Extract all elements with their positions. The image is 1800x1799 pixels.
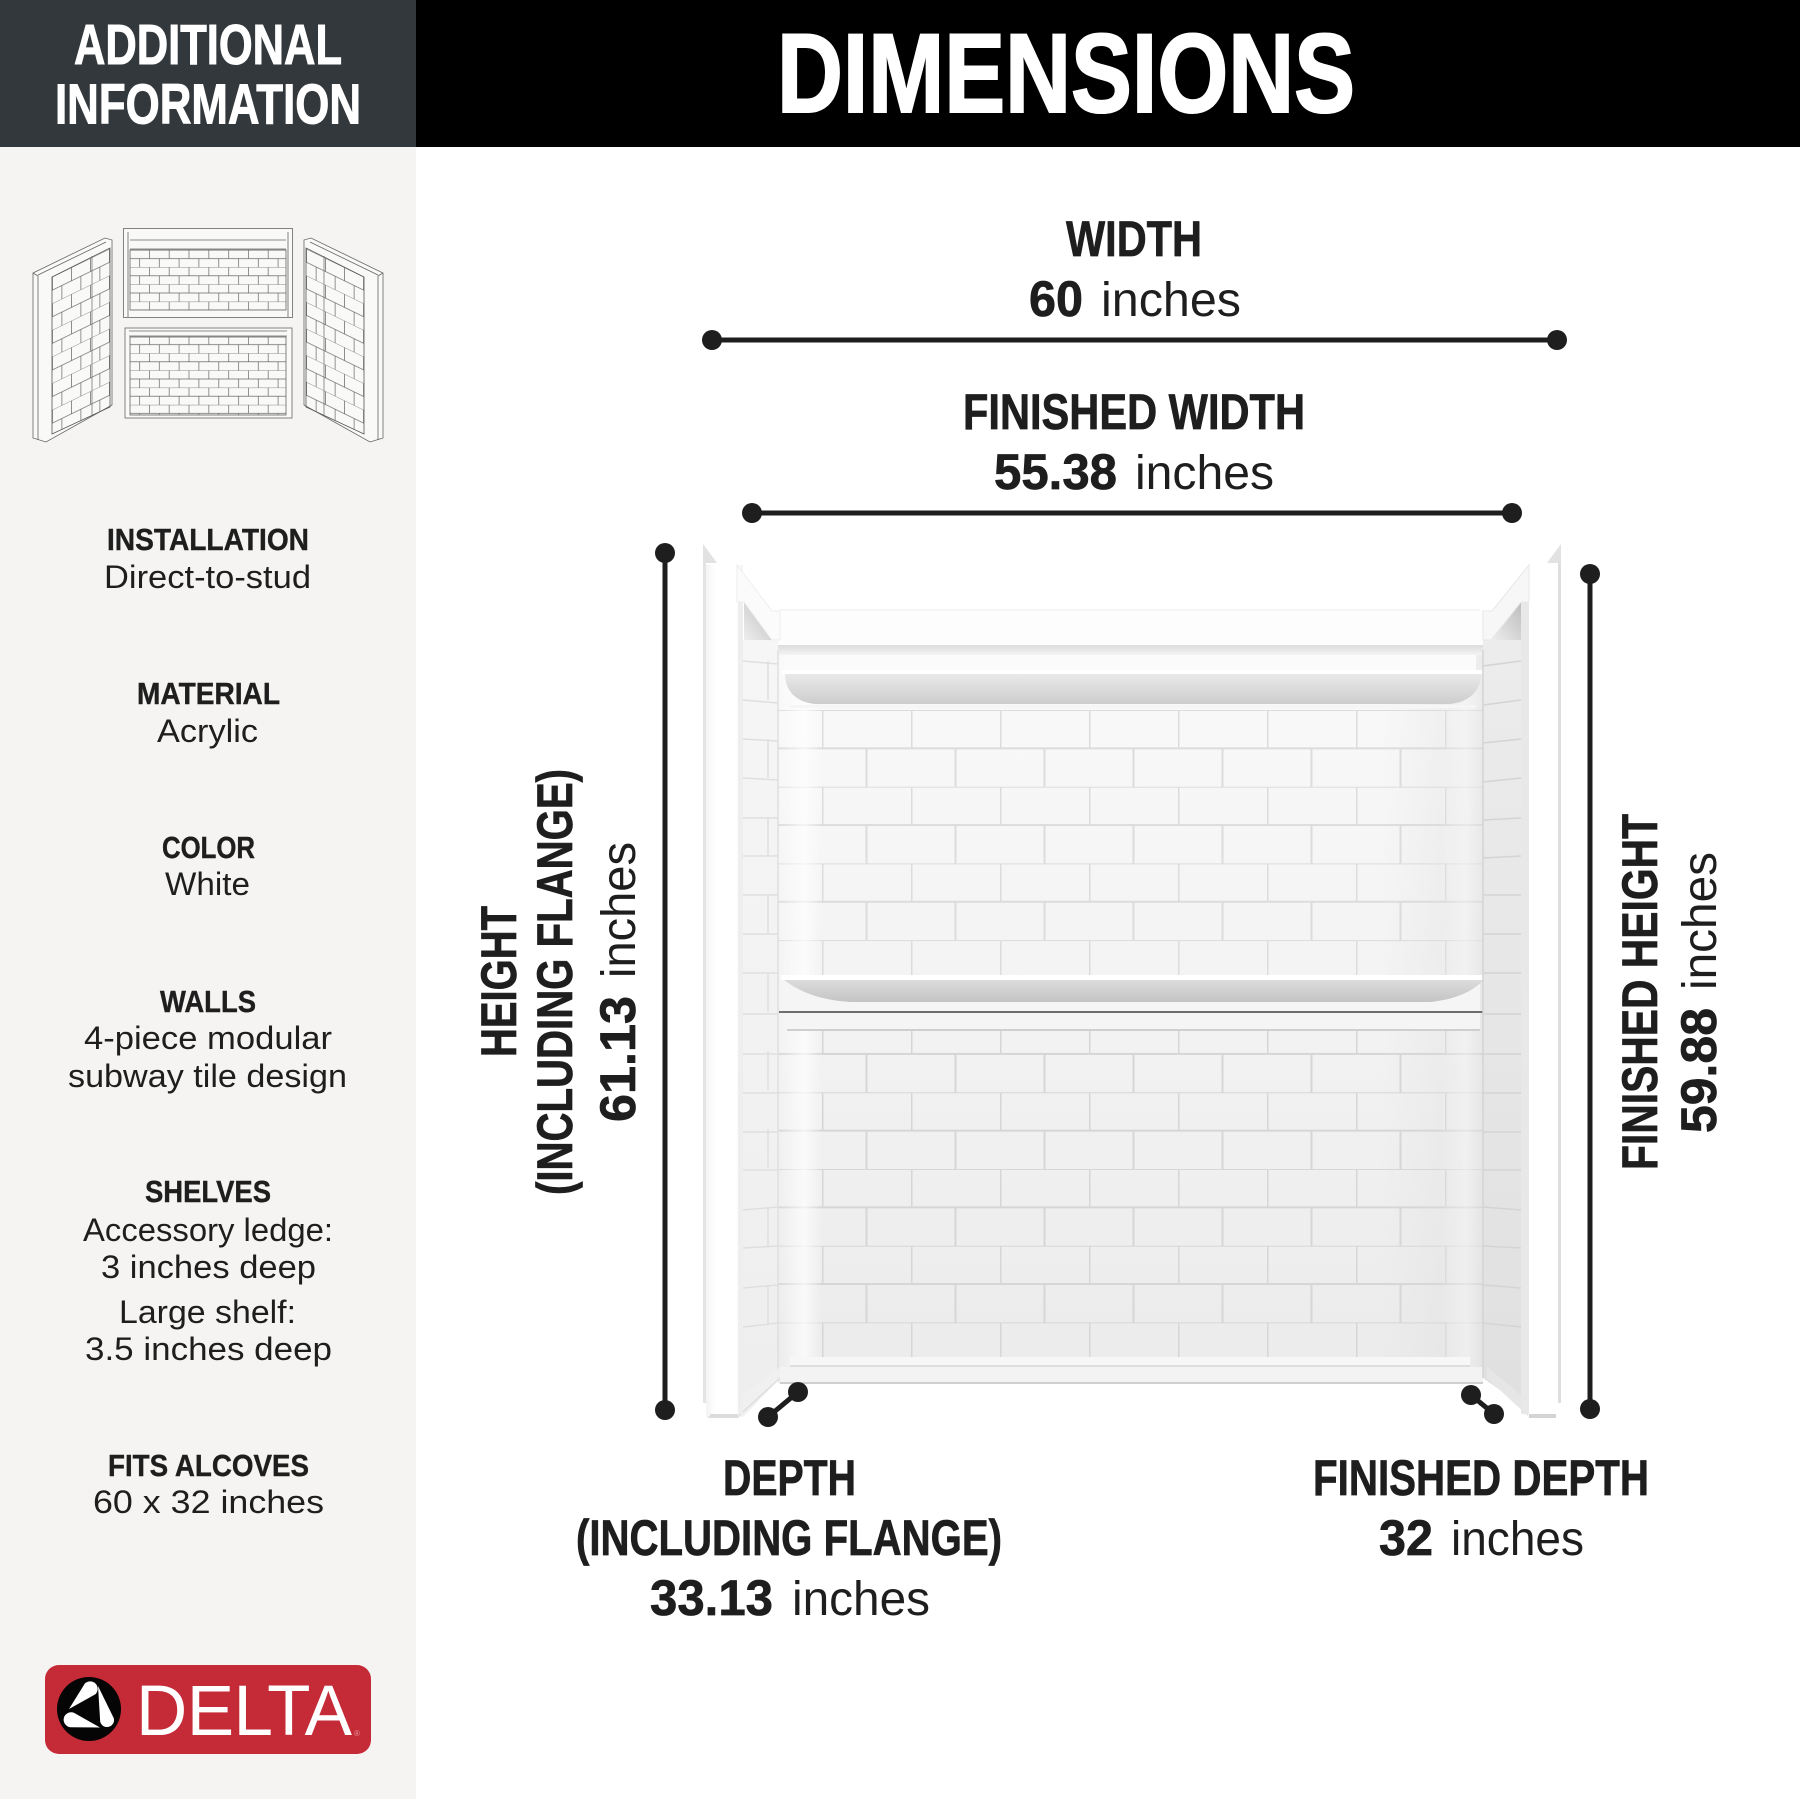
arrow: finished height line [1580,564,1600,1419]
spec: installation [104,522,311,595]
spec: material: Acrylic [157,713,258,749]
spec: shelves [83,1174,333,1367]
spec: shelves: Large shelf: [119,1294,296,1330]
spec: fits alcoves: FITS ALCOVES [108,1448,309,1483]
spec: material: MATERIAL [137,676,280,711]
dimension: finished width: FINISHED WIDTH [963,384,1305,440]
dimension: finished height: 59.88 [1671,1008,1727,1133]
shower wall product image [703,544,1561,1418]
logo: delta: DELTA [136,1672,353,1751]
arrow: depth marker [758,1382,808,1427]
dimension: width: WIDTH [1066,211,1202,267]
spec: shelves: SHELVES [145,1174,271,1209]
dimension: depth including flange [576,1450,1002,1626]
top cap [778,609,1483,672]
dimension: finished width: 55.38 [994,444,1117,500]
left flange [703,544,780,1418]
dimension: finished height [1612,814,1727,1170]
spec: color: White [165,866,250,902]
arrow: height line [655,543,675,1420]
arrow: width line [702,330,1567,350]
heading: additional information [0,0,416,147]
title bar: dimensions [416,0,1800,147]
spec: fits alcoves [93,1448,324,1520]
upper shelf [782,670,1482,708]
dimension: finished depth [1313,1450,1649,1566]
spec: fits alcoves: 60 x 32 inches [93,1484,324,1520]
dimension: finished depth: FINISHED DEPTH [1313,1450,1649,1506]
arrow: finished depth marker [1461,1385,1504,1424]
dimension: finished depth: 32 [1379,1510,1433,1566]
dimension: depth including flange: inches [792,1573,930,1626]
dimension: height including flange: 61.13 [590,996,646,1122]
dimension: height including flange [471,769,646,1195]
panel: additional information sidebar [0,0,416,1799]
heading: additional information: INFORMATION [55,72,361,136]
dimension: height including flange: inches [593,842,646,978]
dimension: height including flange: HEIGHT [471,906,527,1057]
dimension: finished depth: inches [1451,1513,1584,1566]
dimension: width: inches [1101,274,1241,327]
arrow: finished width line [742,503,1522,523]
dimension: finished height: FINISHED HEIGHT [1612,814,1668,1170]
spec: shelves: 3.5 inches deep [85,1331,332,1367]
back wall [778,610,1483,1383]
spec: walls: subway tile design [68,1058,347,1094]
dimension: width [1029,211,1241,327]
right side wall [1483,602,1521,1405]
logo: delta: ® [354,1729,360,1738]
dimension: height including flange: (INCLUDING FLANGE) [527,769,583,1195]
dimension: finished width: inches [1135,447,1274,500]
dimension: finished width [963,384,1305,500]
dimension: depth including flange: DEPTH [723,1450,856,1506]
right flange [1483,544,1561,1418]
illustration: four wall panels [33,228,383,442]
left side wall [743,602,778,1405]
heading: additional information: ADDITIONAL [74,13,342,77]
spec: color: COLOR [162,830,255,865]
spec: walls: WALLS [160,984,256,1019]
base [780,1357,1483,1384]
title bar: dimensions: DIMENSIONS [777,11,1355,136]
spec: installation: Direct-to-stud [104,559,311,595]
dimension: width: 60 [1029,271,1083,327]
spec: walls: 4-piece modular [84,1020,332,1056]
spec: shelves: 3 inches deep [101,1249,316,1285]
spec: color [162,830,255,902]
dimension: depth including flange: (INCLUDING FLANGE) [576,1510,1002,1566]
middle shelf with accessory ledge [779,975,1487,1031]
spec: material [137,676,280,749]
spec: installation: INSTALLATION [107,522,309,557]
logo: delta [45,1665,371,1754]
spec: shelves: Accessory ledge: [83,1212,333,1248]
dimension: depth including flange: 33.13 [650,1570,773,1626]
spec: walls [68,984,347,1094]
dimension: finished height: inches [1674,852,1727,990]
